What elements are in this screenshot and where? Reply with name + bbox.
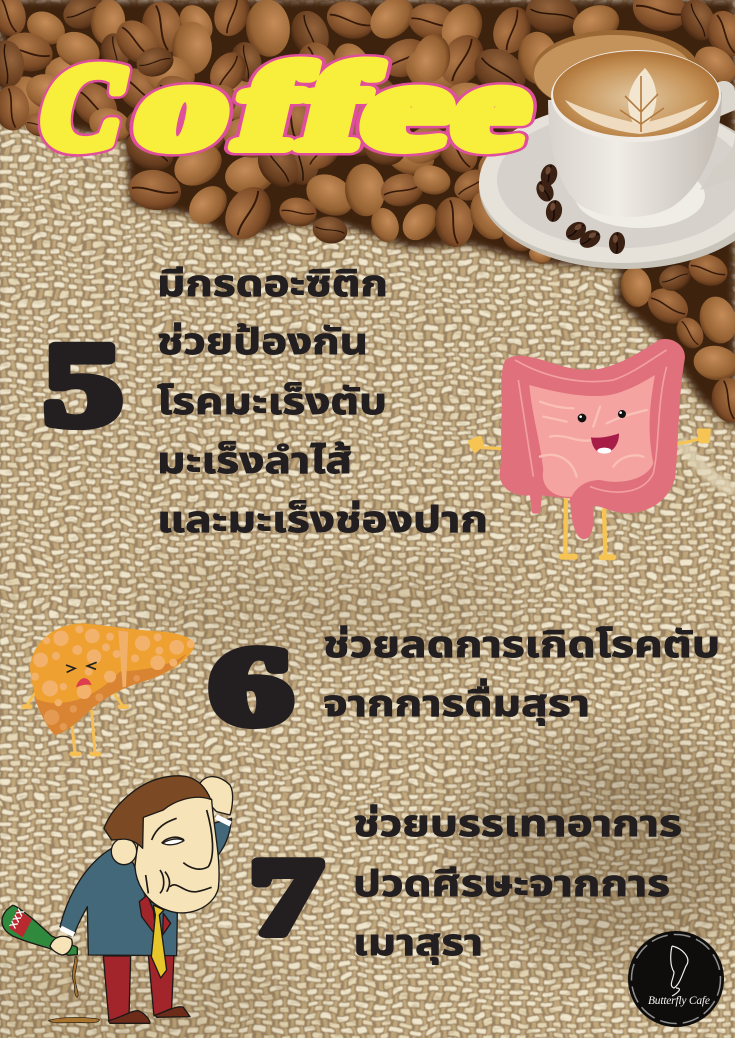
title: Coffee: e [351, 41, 467, 174]
spilled liquid [48, 957, 99, 1023]
coffee cup on saucer [479, 30, 735, 269]
title: Coffee: C [27, 41, 141, 174]
trousers and shoes [103, 954, 190, 1023]
title: Coffee: o [124, 41, 244, 174]
text block: point 6: จากการดื่มสุรา [323, 678, 590, 733]
text block: point 5: ช่วยป้องกัน [157, 317, 368, 371]
raised arm and hand [200, 777, 233, 858]
logo: Butterfly Cafe badge [628, 931, 724, 1027]
facial features [146, 810, 213, 893]
ear [111, 838, 137, 865]
title: Coffee: e [441, 41, 545, 174]
arm cuff and bottle [2, 905, 77, 955]
hair [104, 776, 211, 848]
number 7: 7 [250, 838, 322, 957]
icon: sad liver character [23, 623, 195, 754]
title: Coffee: C [27, 41, 141, 174]
arm cuff and bottle: XXX [8, 907, 28, 931]
title: Coffee: o [124, 41, 244, 174]
title: Coffee: f [226, 41, 319, 174]
coffee surface with latte art [532, 30, 721, 142]
text block: point 7: ช่วยบรรเทาอาการ [353, 799, 682, 853]
text block: point 7 [353, 799, 682, 972]
illustration: hungover man with bottle [2, 776, 233, 1023]
text block: point 5: มีกรดอะซิติก [157, 259, 388, 313]
cup body [548, 81, 735, 217]
text block: point 5 [157, 259, 488, 549]
face [135, 796, 219, 913]
title: Coffee: e [441, 41, 545, 174]
text block: point 6 [323, 620, 720, 733]
collar, shirt and tie [139, 895, 171, 978]
title: Coffee: e [351, 41, 467, 174]
text block: point 5: มะเร็งลำไส้ [157, 436, 352, 490]
saucer [479, 103, 735, 269]
title: Coffee: f [290, 41, 385, 174]
number 6: 6 [210, 625, 292, 747]
text block: point 7: เมาสุรา [353, 918, 483, 972]
jacket [60, 848, 177, 956]
icon: smiling intestine character [469, 341, 709, 557]
title: Coffee: f [226, 41, 319, 174]
logo: Butterfly Cafe badge: Butterfly Cafe [648, 995, 710, 1007]
text block: point 5: และมะเร็งช่องปาก [157, 495, 488, 549]
text block: point 5: โรคมะเร็งตับ [157, 377, 387, 431]
title: Coffee: f [290, 41, 385, 174]
title: Coffee [27, 41, 545, 174]
coffee beans pile [0, 0, 735, 430]
text block: point 7: ปวดศีรษะจากการ [353, 859, 670, 913]
text block: point 6: ช่วยลดการเกิดโรคตับ [323, 620, 720, 674]
number 5: 5 [44, 319, 122, 450]
small beans on saucer [533, 162, 626, 255]
